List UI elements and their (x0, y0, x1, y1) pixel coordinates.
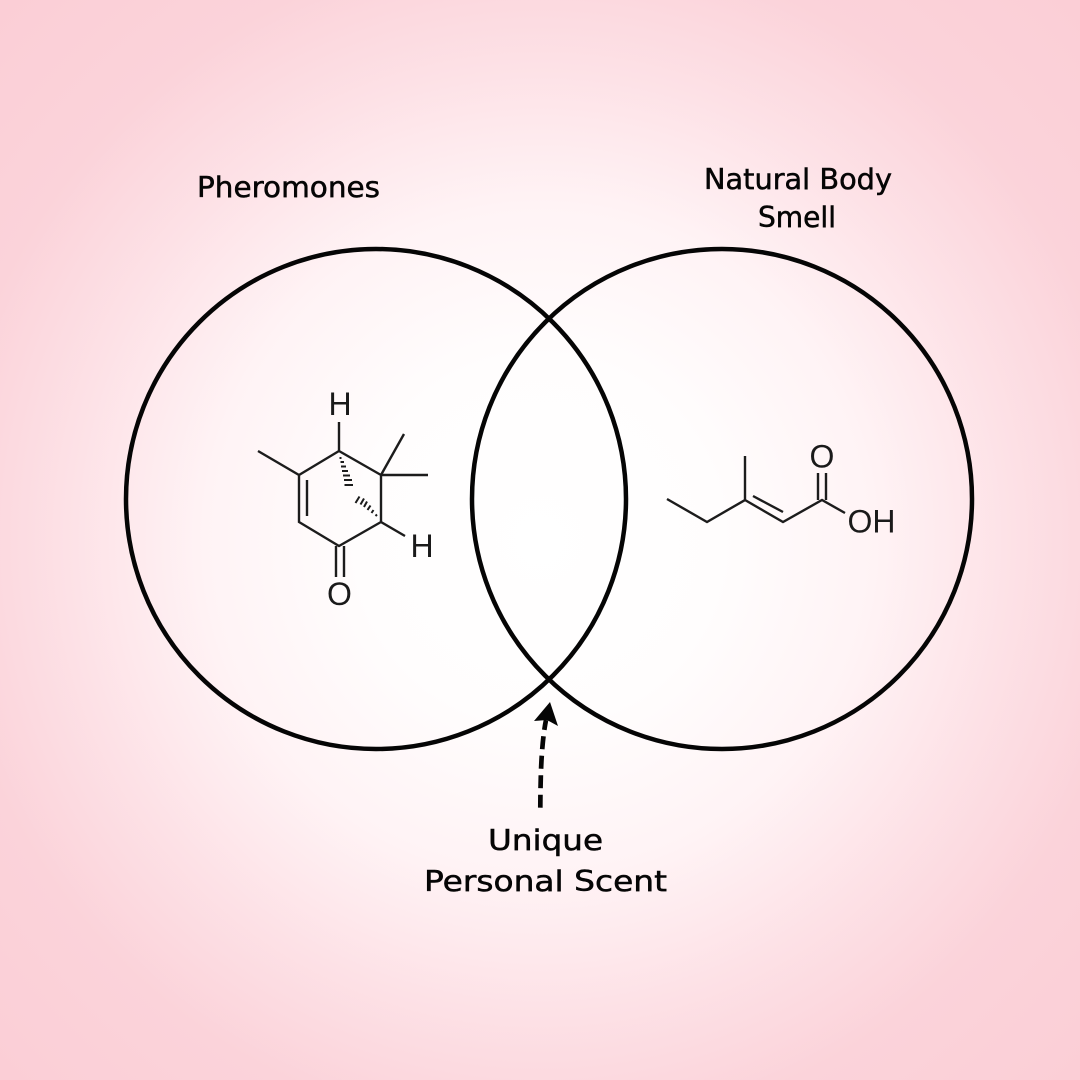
heading: Natural Body Smell: Smell (758, 201, 836, 234)
molecule: body smell structure: OH (848, 504, 896, 540)
hashed bond lower (356, 496, 377, 516)
atom labels: H (328, 386, 352, 422)
heading: Natural Body Smell (704, 163, 892, 234)
heading: Natural Body Smell: Natural Body (704, 163, 892, 196)
molecule: pheromone structure: O (327, 576, 352, 612)
arrow: dashed pointer to overlap (534, 702, 558, 808)
label: Unique Personal Scent: Personal Scent (424, 865, 667, 898)
circle: pheromones (126, 249, 626, 749)
molecule: pheromone structure: H (410, 528, 434, 564)
molecule: body smell structure (667, 438, 896, 540)
circle: natural body smell (472, 249, 972, 749)
label: Unique Personal Scent (424, 824, 667, 898)
molecule: pheromone structure (258, 386, 434, 612)
heading: Pheromones: Pheromones (197, 171, 380, 204)
label: Unique Personal Scent: Unique (488, 824, 603, 857)
atom labels: O (810, 438, 834, 474)
venn diagram (126, 249, 972, 749)
hashed bond upper (340, 458, 353, 485)
